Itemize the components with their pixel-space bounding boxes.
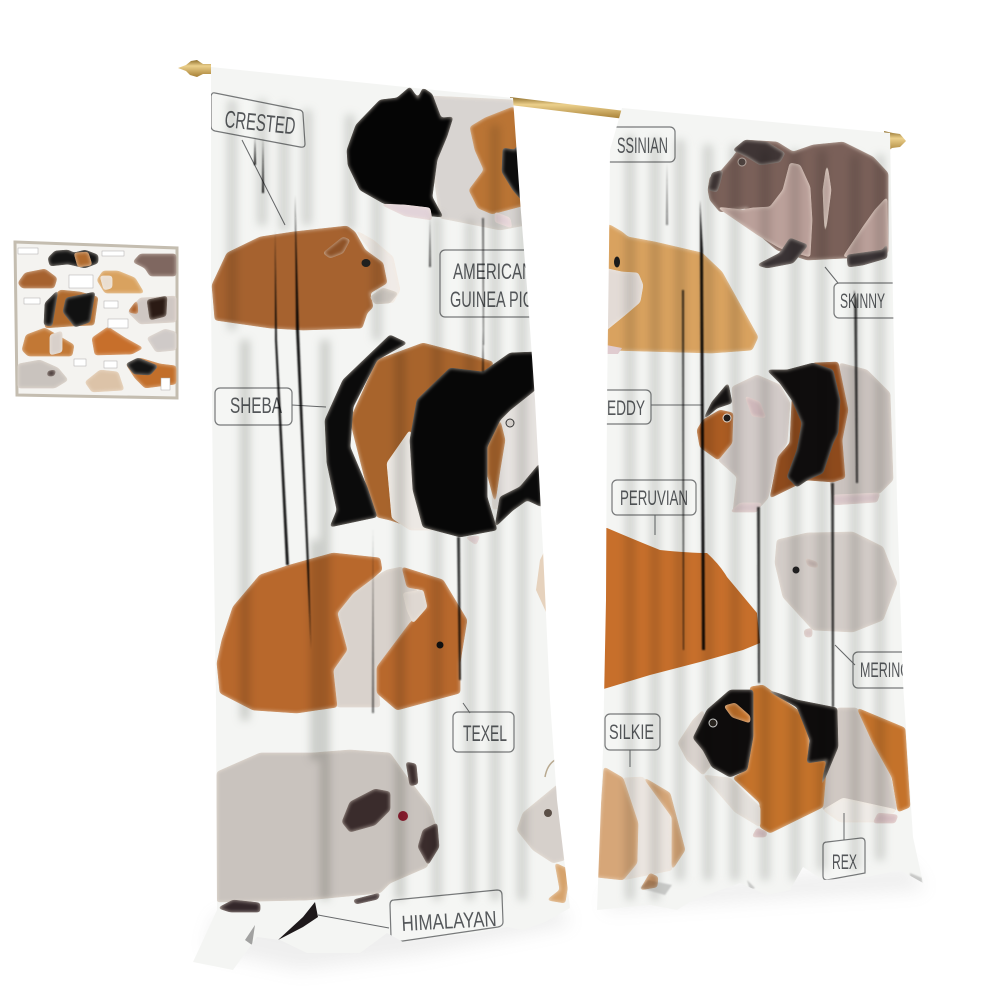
pig: top black and ginger <box>347 87 526 230</box>
label: american guinea pig <box>440 250 540 317</box>
label: merino: MERINO <box>860 659 910 682</box>
label: abyssinian <box>610 126 676 163</box>
label: himalayan: HIMALAYAN <box>401 906 497 936</box>
curtain floor shadow <box>205 865 925 970</box>
panel: left curtain <box>190 60 575 980</box>
right finial <box>884 131 906 152</box>
label: sheba <box>215 388 326 425</box>
left finial <box>178 60 211 77</box>
label: skinny: SKINNY <box>840 290 885 313</box>
thumbnail pigs <box>18 250 176 392</box>
label: teddy <box>590 390 703 424</box>
skinny eye <box>738 158 746 166</box>
pig: silkie <box>596 767 685 890</box>
panel: right curtain <box>590 100 930 920</box>
buff eye and foot <box>606 256 622 354</box>
rod segment between panels <box>510 97 625 119</box>
label: teddy: EDDY <box>607 397 645 420</box>
teddy eye <box>723 414 731 422</box>
pig: buff <box>604 225 758 353</box>
label: merino <box>834 644 904 689</box>
pig: peruvian orange <box>600 528 760 690</box>
pig: himalayan <box>217 750 439 912</box>
label: crested <box>211 93 305 225</box>
label: silkie <box>605 714 660 767</box>
label: skinny <box>824 266 894 319</box>
label: silkie: SILKIE <box>609 721 654 744</box>
pig: rex <box>678 685 910 837</box>
label: himalayan <box>318 890 503 942</box>
himalayan eye <box>398 811 408 821</box>
rex eye <box>709 719 717 727</box>
label: american guinea pig: AMERICAN <box>453 259 533 284</box>
texel eye <box>436 642 444 648</box>
pig: crested brown <box>212 226 400 330</box>
pig: small edge fragment <box>536 548 546 612</box>
curtain rod <box>178 60 906 152</box>
crested eye <box>362 259 370 267</box>
right curtain folds <box>630 135 922 900</box>
label: texel: TEXEL <box>463 721 507 746</box>
label: peruvian <box>612 480 696 535</box>
label: rex: REX <box>832 851 857 874</box>
label: crested: CRESTED <box>223 106 297 140</box>
thumbnail frame <box>15 242 177 398</box>
left curtain fabric <box>190 60 575 980</box>
thumbnail labels <box>18 248 170 390</box>
silkie whisker and eye <box>544 760 555 817</box>
framed thumbnail <box>15 242 177 398</box>
label: peruvian: PERUVIAN <box>620 487 688 510</box>
label: texel <box>453 703 514 752</box>
label: abyssinian: SSINIAN <box>617 133 668 158</box>
right curtain fabric <box>590 100 930 920</box>
label: rex <box>823 813 865 880</box>
merino eye <box>792 566 800 574</box>
pig: silkie head fragment <box>517 785 570 903</box>
sheba eye <box>506 419 514 427</box>
pig: sheba <box>325 335 545 545</box>
label: american guinea pig: GUINEA PIG <box>450 287 534 312</box>
label: sheba: SHEBA <box>230 393 282 418</box>
pig: texel <box>217 553 467 713</box>
pig: teddy <box>697 362 893 512</box>
bottom fold creases <box>640 873 922 895</box>
left curtain folds <box>232 100 522 945</box>
pig: skinny <box>708 140 888 268</box>
pig: merino <box>775 532 897 637</box>
